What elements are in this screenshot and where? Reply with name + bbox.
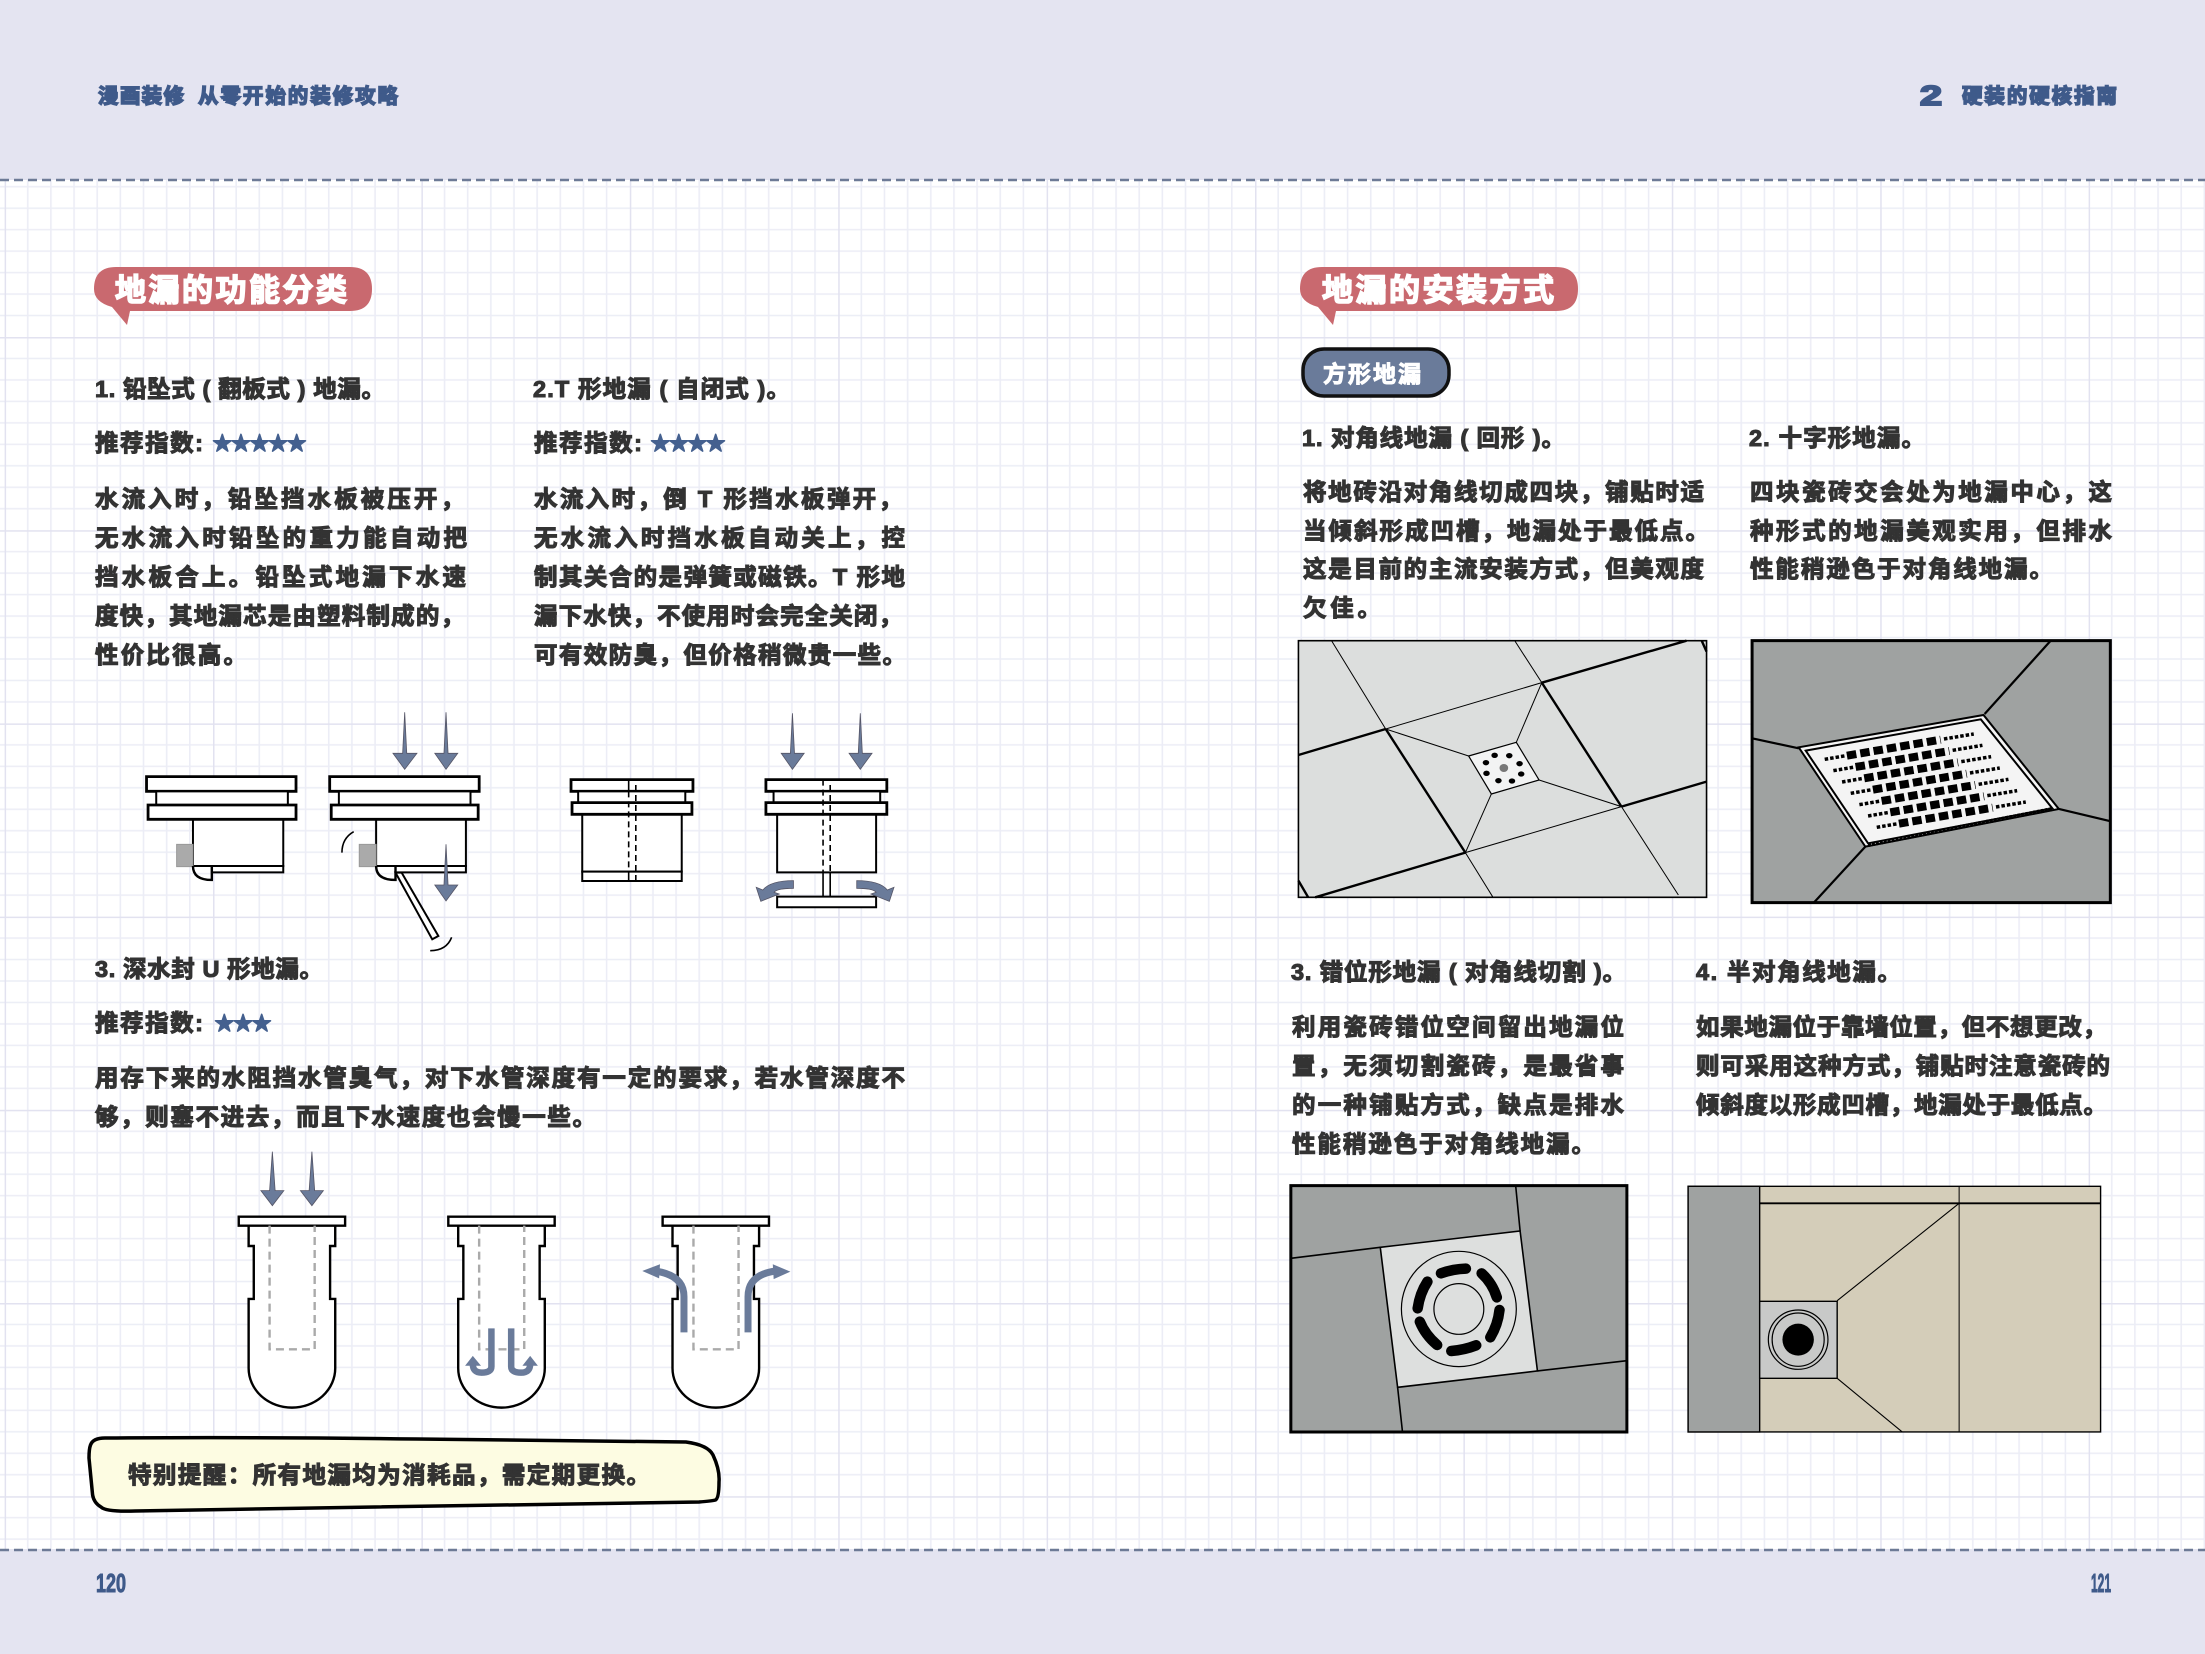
method 3 text (1291, 958, 1626, 1157)
item 3 body: 用存下来的水阻挡水管臭气，对下水管深度有一定的要求，若水管深度不 (95, 1065, 905, 1091)
item 3 text: deep water seal U-shaped drain (95, 956, 905, 1130)
item 3 body: 够，则塞不进去，而且下水速度也会慢一些。 (95, 1103, 596, 1130)
callout: special reminder (89, 1438, 719, 1511)
arrows flowing into open lead weight drain (393, 712, 458, 901)
item 1 body: 水流入时，铅坠挡水板被压开， (95, 486, 464, 512)
method 2 title: 2. 十字形地漏。 (1749, 425, 1925, 451)
item 2 body: 漏下水快，不使用时会完全关闭， (534, 603, 902, 629)
heading: functional classification (94, 267, 372, 325)
item 2 body (534, 486, 906, 668)
method 3 title: 3. 错位形地漏 ( 对角线切割 )。 (1291, 958, 1626, 985)
tube A arrows (261, 1152, 323, 1206)
arrows for T drain (756, 713, 894, 901)
illustration: half diagonal drain (1688, 1186, 2101, 1432)
item 2 text: T-shaped floor drain (533, 376, 906, 668)
method 3 body (1292, 1013, 1624, 1157)
running header right: chapter (1920, 80, 2117, 111)
method 1 text (1302, 425, 1709, 621)
callout: special reminder: 特别提醒：所有地漏均为消耗品，需定期更换。 (128, 1462, 650, 1488)
item 2 title: 2.T 形地漏 ( 自闭式 )。 (533, 376, 790, 402)
method 4 body: 如果地漏位于靠墙位置，但不想更改， (1696, 1013, 2106, 1040)
method 1 body: 将地砖沿对角线切成四块，铺贴时适 (1303, 478, 1704, 505)
tube B (448, 1217, 555, 1408)
item 2 body: 无水流入时挡水板自动关上，控 (534, 525, 905, 551)
running header left: book title (98, 84, 398, 108)
item 2 rating: ★★★★ (650, 431, 726, 457)
item 3 body (95, 1065, 905, 1130)
subheading pill: square drains: 方形地漏 (1323, 361, 1421, 387)
item 3 title: 3. 深水封 U 形地漏。 (95, 956, 323, 982)
item 2 body: 水流入时，倒 T 形挡水板弹开， (534, 486, 902, 512)
grate slots (1825, 734, 2026, 827)
tube B return arrows (466, 1328, 537, 1373)
method 2 body (1750, 478, 2112, 582)
method 1 body: 这是目前的主流安装方式，但美观度 (1303, 555, 1704, 582)
item 2 rating (534, 430, 726, 457)
page number 120: 120 (96, 1568, 126, 1598)
chapter number: 2 (1920, 80, 1942, 111)
item 1 body: 挡水板合上。铅坠式地漏下水速 (95, 564, 466, 590)
drain T open (766, 780, 887, 907)
illustration: cross drain (1752, 641, 2110, 903)
method 4 text (1696, 959, 2110, 1118)
running header left: book title: 漫画装修 (98, 85, 184, 108)
text: 121 (2091, 1568, 2111, 1598)
drain T closed (571, 780, 693, 881)
drain A open with flap (330, 777, 479, 951)
tube C (663, 1217, 769, 1408)
diagram: lead weight and T-shaped drains (147, 712, 894, 951)
heading: installation methods (1300, 267, 1578, 325)
method 2 body: 性能稍逊色于对角线地漏。 (1750, 556, 2053, 582)
method 1 title: 1. 对角线地漏 ( 回形 )。 (1302, 425, 1565, 451)
item 3 rating: ★★★ (214, 1011, 272, 1037)
item 1 rating: 推荐指数: (95, 430, 203, 456)
method 2 body: 种形式的地漏美观实用，但排水 (1750, 518, 2112, 544)
diagram: U-shaped drains (239, 1152, 789, 1408)
method 2 body: 四块瓷砖交会处为地漏中心，这 (1750, 478, 2112, 505)
item 1 rating: ★★★★★ (212, 431, 307, 457)
tube A (239, 1217, 345, 1408)
method 4 title: 4. 半对角线地漏。 (1696, 959, 1901, 985)
method 4 body: 则可采用这种方式，铺贴时注意瓷砖的 (1696, 1052, 2110, 1079)
method 3 body: 置，无须切割瓷砖，是最省事 (1292, 1053, 1624, 1079)
method 3 body: 利用瓷砖错位空间留出地漏位 (1292, 1013, 1624, 1040)
grate holes (1483, 753, 1524, 784)
heading: installation methods: 地漏的安装方式 (1322, 273, 1554, 308)
method 1 body: 当倾斜形成凹槽，地漏处于最低点。 (1303, 518, 1709, 544)
tube C outflow arrows (644, 1265, 789, 1332)
item 2 body: 可有效防臭，但价格稍微贵一些。 (534, 642, 906, 668)
item 2 rating: 推荐指数: (534, 430, 642, 456)
method 1 body: 欠佳。 (1303, 595, 1381, 621)
illustration: diagonal drain (1298, 641, 1707, 897)
bottom footer band (0, 1549, 2205, 1654)
method 2 text (1749, 425, 2112, 582)
method 4 body: 倾斜度以形成凹槽，地漏处于最低点。 (1696, 1092, 2107, 1118)
method 1 body (1303, 478, 1709, 621)
ring slots (1418, 1269, 1500, 1351)
item 3 rating: 推荐指数: (95, 1010, 203, 1036)
item 1 body (95, 486, 468, 668)
item 1 text: lead weight floor drain (95, 376, 468, 668)
method 3 body: 性能稍逊色于对角线地漏。 (1292, 1131, 1595, 1157)
top header band (0, 0, 2205, 180)
drain A closed (147, 777, 296, 880)
item 1 body: 性价比很高。 (95, 642, 247, 668)
item 3 rating (95, 1010, 272, 1037)
item 1 title: 1. 铅坠式 ( 翻板式 ) 地漏。 (95, 376, 385, 402)
item 1 rating (95, 430, 307, 457)
item 1 body: 度快，其地漏芯是由塑料制成的， (95, 603, 464, 629)
heading: functional classification: 地漏的功能分类 (115, 273, 347, 308)
method 4 body (1696, 1013, 2110, 1118)
item 2 body: 制其关合的是弹簧或磁铁。T 形地 (534, 563, 905, 590)
method 3 body: 的一种铺贴方式，缺点是排水 (1292, 1091, 1624, 1118)
item 1 body: 无水流入时铅坠的重力能自动把 (95, 525, 468, 551)
chapter title: 硬装的硬核指南 (1962, 84, 2117, 108)
running header left: book title: 从零开始的装修攻略 (198, 84, 398, 108)
subheading pill: square drains (1303, 349, 1449, 396)
illustration: staggered drain (1291, 1186, 1627, 1432)
